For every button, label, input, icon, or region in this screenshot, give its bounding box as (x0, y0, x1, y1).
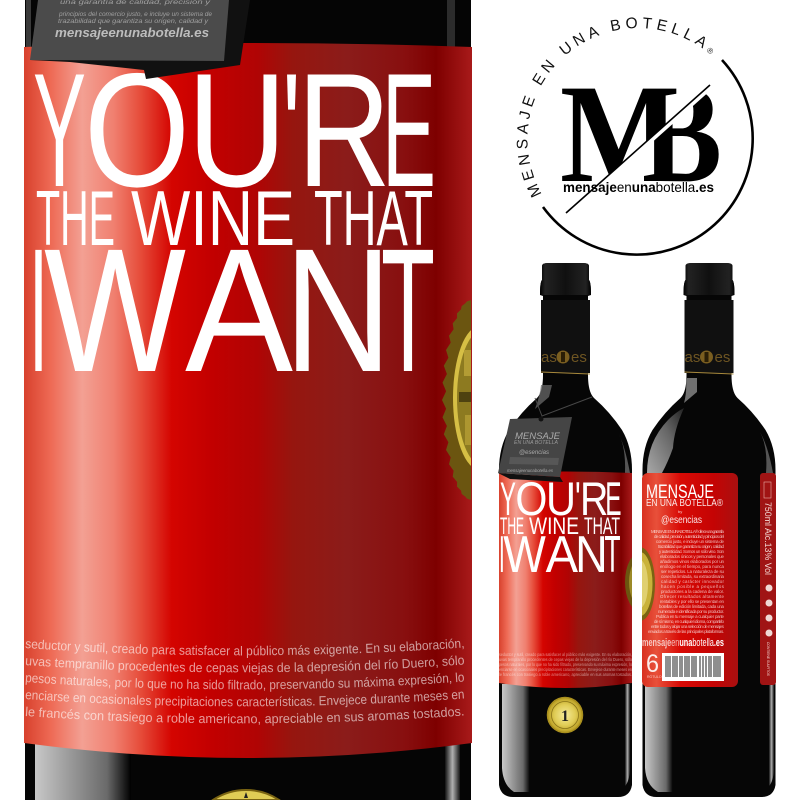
label body copy (26, 638, 464, 726)
front label headline (499, 472, 622, 584)
back label body copy: entre todos y alojar una selección de mensajes (651, 624, 725, 629)
back label number 6: 6 (646, 650, 659, 678)
large hang tag: trazabilidad que garantiza su origen, calidad y (58, 19, 209, 25)
front bottle neck band: as (541, 349, 557, 366)
front label headline: R (580, 472, 608, 525)
front label headline: E (605, 472, 622, 525)
logo URL: mensajeenunabotella.es (563, 179, 714, 195)
back label body copy: trazabilidad que garantiza su origen, calidad (658, 544, 725, 549)
front bottle string and tag: EN UNA BOTELLA (514, 440, 559, 446)
side strip label: CONTIENE SULFITOS (766, 642, 770, 677)
headline: YOU'RE THE WINE THAT I WANT: U (187, 40, 287, 221)
front label headline: Y (500, 472, 516, 525)
barcode (662, 653, 724, 681)
front label small copy: pesos naturales, por lo que no ha sido filtrado, preservando su máxima expresión, lo (499, 662, 633, 667)
back label heading: @esencias (661, 515, 702, 526)
front label headline: U (546, 472, 576, 525)
large bottle gold seal (442, 300, 471, 500)
front label small copy: enciarse en ocasionales precipitaciones características. Envejece durante meses en (499, 667, 633, 672)
headline: YOU'RE THE WINE THAT I WANT: R (297, 40, 391, 221)
back label (642, 473, 738, 687)
logo circular text: MENSAJE EN UNA BOTELLA® (516, 17, 713, 198)
headline: YOU'RE THE WINE THAT I WANT: THAT (314, 174, 433, 262)
headline: YOU'RE THE WINE THAT I WANT: N (284, 213, 392, 409)
back label heading (646, 482, 724, 526)
large bottle close-up (24, 0, 472, 800)
back label body copy: Ofrecer resultados altamente (660, 594, 725, 599)
back label body copy: comercio justo, e incluye un sistema de (656, 539, 725, 544)
front bottle highlights (502, 385, 630, 792)
front label small copy (499, 652, 633, 677)
back bottle neck band: es (714, 349, 730, 366)
side strip label (760, 473, 776, 685)
front label headline: ' (575, 472, 581, 525)
back label body copy: botellas de edición limitada, cada una (659, 604, 725, 609)
front label headline: N (575, 526, 608, 584)
front label headline: THAT (584, 513, 620, 540)
back label body copy: cosecha limitada, su extraordinaria (661, 574, 725, 579)
headline: YOU'RE THE WINE THAT I WANT: ' (282, 40, 301, 221)
large bottle glass (25, 0, 471, 800)
front bottle string and tag: @esencias (519, 449, 550, 456)
back bottle (642, 263, 776, 797)
back label body copy: ser repetidos. La naturaleza de su (661, 569, 725, 574)
back label body copy: rentables y por ello se presentan en (660, 599, 725, 604)
front bottle capsule (540, 263, 591, 295)
back label body copy: MENSAJE EN UNA BOTELLA® ofrece una garantía (651, 529, 725, 534)
back label body copy: de sí mismo, en cualquier idioma, compartirlo (654, 619, 725, 624)
headline: YOU'RE THE WINE THAT I WANT: A (185, 213, 294, 409)
label body copy: enciarse en ocasionales precipitaciones características. Envejece durante meses en (26, 690, 464, 708)
front bottle string and tag: mensajeenunabotella.es (507, 468, 554, 473)
back label body copy: enviados a través de las principales plataformas. (648, 629, 724, 634)
logo monogram MB: B (642, 56, 722, 212)
headline: YOU'RE THE WINE THAT I WANT: THE (36, 174, 115, 262)
back label URL: mensajeenunabotella.es (642, 637, 724, 649)
logo ring arc (543, 60, 753, 255)
back label body copy (648, 529, 725, 634)
logo: Mensaje en una Botella (516, 17, 754, 256)
front bottle glass (499, 263, 632, 797)
back label body copy: y autenticidad. Somos un sólo vino. Son (659, 549, 725, 554)
back label body copy: calidad y carácter innovador (661, 579, 725, 584)
front label headline: A (546, 526, 578, 584)
label body copy: pesos naturales, por lo que no ha sido filtrado, preservando su máxima expresión, lo (26, 672, 464, 692)
headline: YOU'RE THE WINE THAT I WANT: O (84, 40, 190, 221)
back label number 6: RÓTULO (647, 674, 662, 679)
back label body copy: de calidad, precisión, autenticidad y principios del (654, 534, 724, 539)
back label body copy: productores a la cadena de valor. (661, 589, 724, 594)
large hang tag: una garantía de calidad, precisión y (60, 0, 212, 6)
headline: YOU'RE THE WINE THAT I WANT: T (381, 213, 435, 409)
label body copy: le francés con trasiego a roble americano, apreciable en sus aromas tostados. (26, 706, 464, 726)
front label small copy: le francés con trasiego a roble americano, apreciable en sus aromas tostados. (499, 672, 632, 677)
back label heading: MENSAJE (646, 482, 714, 503)
back label body copy: elaborados únicos y personales que (660, 554, 725, 559)
label body copy: uvas tempranillo procedentes de cepas viejas de la depresión del río Duero, sólo (26, 656, 464, 675)
label body copy: seductor y sutil, creado para satisfacer al público más exigente. En su elaboración, (26, 638, 464, 658)
front bottle (498, 263, 632, 797)
large hang tag: mensajeenunabotella.es (55, 25, 209, 40)
large hang tag: principios del comercio justo, e incluye un sistema de (58, 12, 213, 18)
front bottle neck band (541, 300, 590, 374)
back bottle glass (642, 263, 776, 797)
back label heading: by (678, 509, 682, 514)
front label headline: THE (500, 513, 524, 540)
headline: YOU'RE THE WINE THAT I WANT: WINE (131, 174, 295, 262)
back bottle neck band: as (684, 349, 700, 366)
front bottle red label (499, 472, 632, 688)
large bottle bottom seal (213, 790, 279, 800)
front bottle numbered medal: 1 (561, 708, 569, 725)
front label headline: WINE (529, 513, 579, 540)
back label gold seal (642, 548, 655, 620)
large bottle close-up: E (382, 40, 436, 221)
front label seal edge (625, 558, 632, 607)
large red label (24, 43, 472, 758)
front label headline: T (604, 526, 621, 584)
large hang tag (30, 0, 250, 79)
front bottle string and tag (498, 397, 592, 482)
back label body copy: Publica en tu mensaje a cualquier parte (656, 614, 725, 619)
back label body copy: numerada e identificada por su productor. (658, 609, 724, 614)
headline: YOU'RE THE WINE THAT I WANT: W (44, 213, 186, 409)
back label heading: EN UNA BOTELLA® (646, 498, 724, 509)
front label small copy: seductor y sutil, creado para satisfacer al público más exigente. En su elaboración, (499, 652, 632, 657)
back label body copy: hacen posible a pequeños (661, 584, 725, 589)
front label headline: O (515, 472, 547, 525)
front label small copy: uvas tempranillo procedentes de cepas viejas de la depresión del río Duero, sólo (499, 657, 633, 662)
front label headline: W (503, 526, 546, 584)
headline: YOU'RE THE WINE THAT I WANT (29, 40, 436, 409)
logo monogram MB (562, 84, 719, 214)
front label headline: I (499, 526, 505, 584)
front bottle neck band: es (571, 349, 587, 366)
back label body copy: añadimos vinos elaborados por un (660, 559, 725, 564)
side strip label: 750ml Alc.13% Vol (763, 502, 773, 575)
back bottle highlights (645, 378, 774, 792)
front bottle string and tag: MENSAJE (515, 431, 561, 441)
back label body copy: enólogo en el tiempo, para nunca (660, 564, 725, 569)
back bottle capsule (684, 263, 734, 295)
back bottle neck band (684, 300, 734, 374)
logo monogram MB: M (560, 56, 680, 212)
headline: YOU'RE THE WINE THAT I WANT: Y (33, 40, 86, 221)
headline: YOU'RE THE WINE THAT I WANT: I (29, 213, 48, 409)
front bottle numbered medal (548, 698, 582, 732)
